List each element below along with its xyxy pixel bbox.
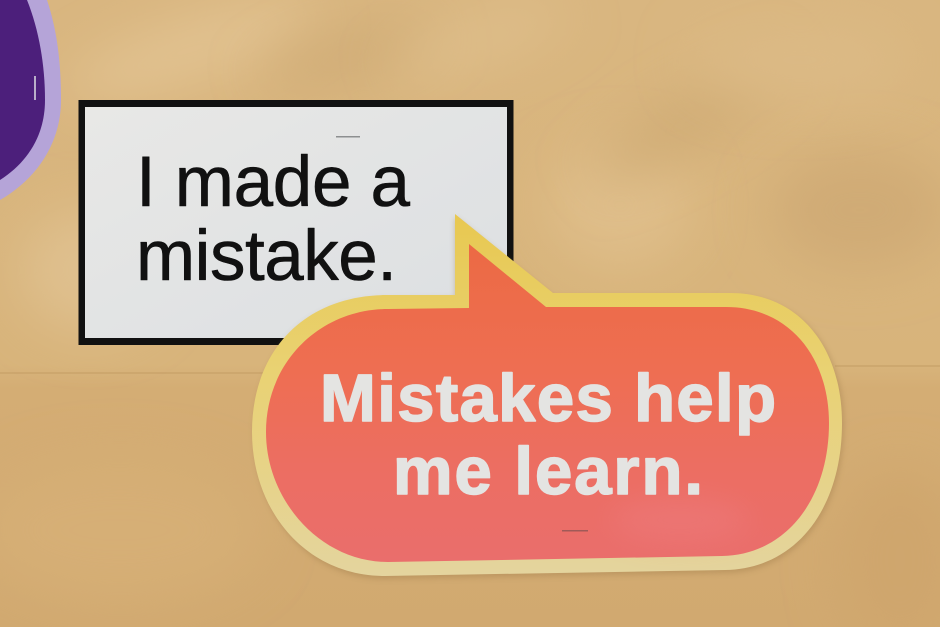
card text	[136, 143, 410, 296]
staple mark	[336, 136, 360, 138]
card text: mistake.	[136, 217, 397, 296]
bubble soft shadow	[254, 217, 844, 579]
bubble text: Mistakes help	[320, 361, 776, 436]
staple	[34, 76, 36, 100]
white card: I made a mistake	[78, 100, 514, 345]
purple circle card, cropped at left edge	[0, 0, 61, 200]
glare	[610, 498, 750, 542]
bubble text: me learn.	[393, 434, 703, 509]
card text: I made a	[136, 143, 410, 222]
staple	[562, 530, 588, 532]
speech bubble: Mistakes help me learn	[252, 214, 842, 576]
bubble text	[320, 361, 776, 509]
